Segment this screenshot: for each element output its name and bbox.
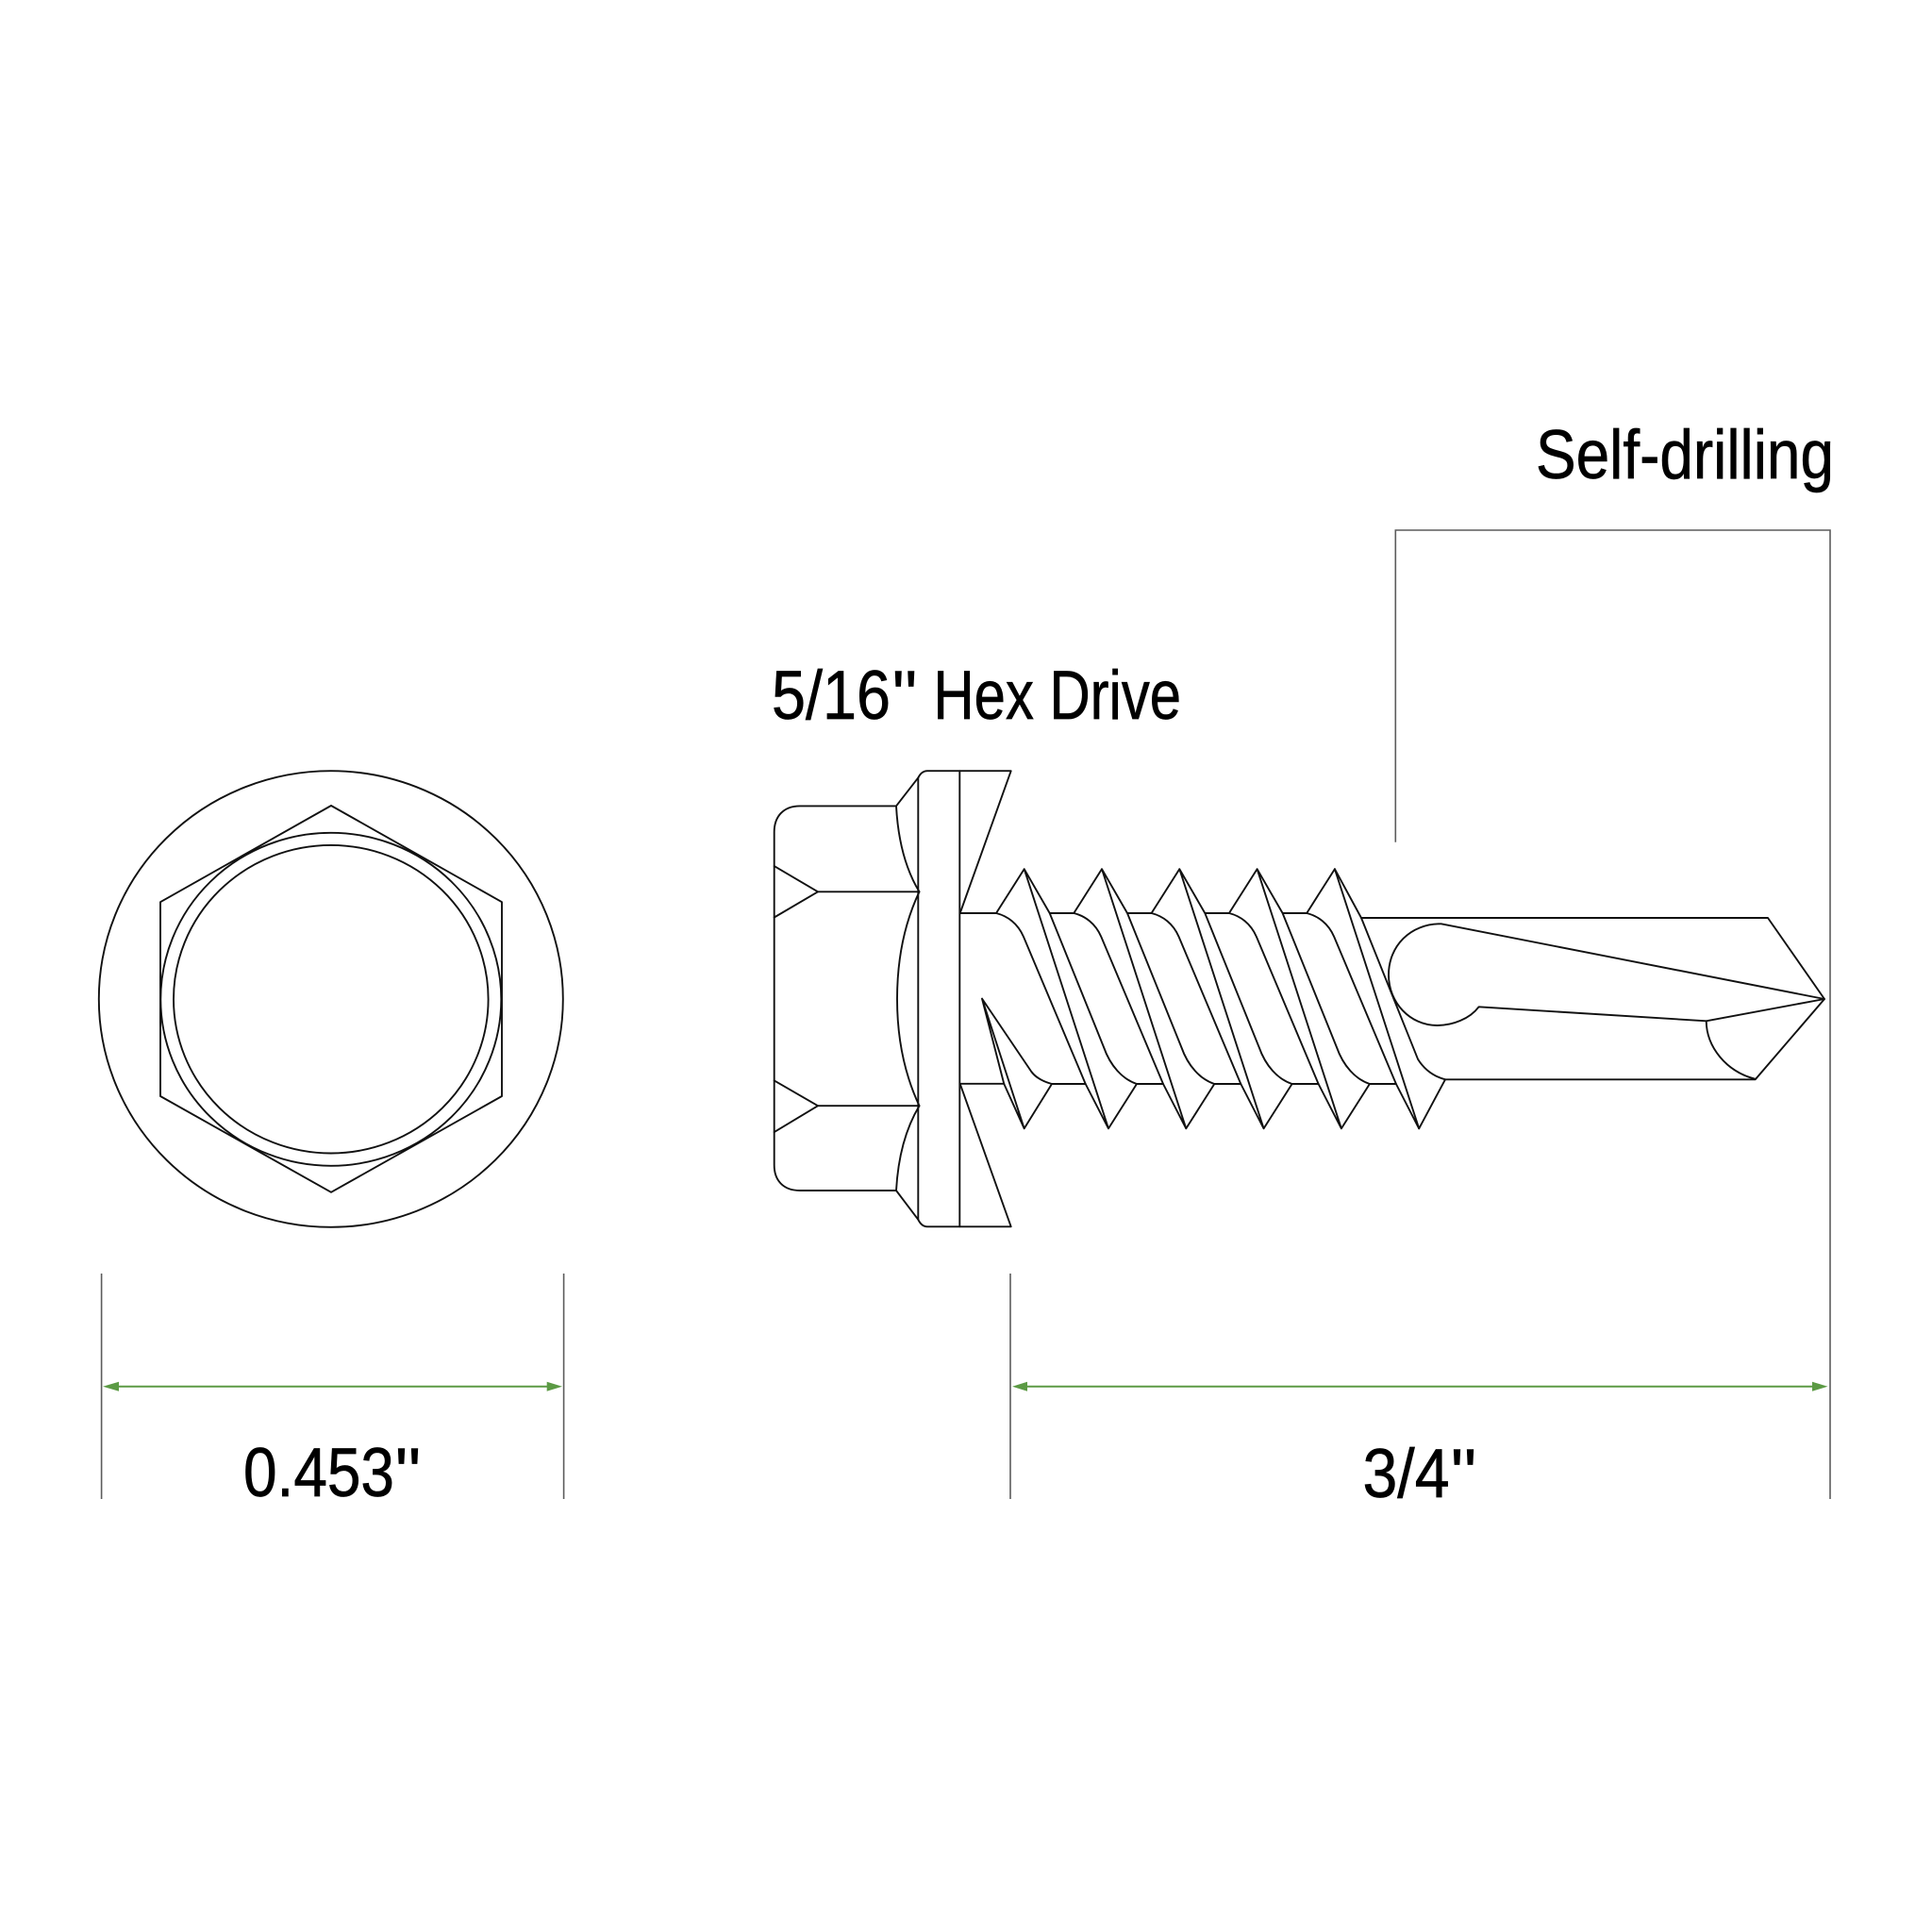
label: hex drive size: 5/16 — [772, 658, 891, 734]
dimension: head diameter — [102, 1274, 564, 1499]
drill point — [1361, 918, 1824, 1079]
label: screw length value: 3/4 — [1362, 1436, 1449, 1512]
label: hex drive size: Hex Drive — [934, 658, 1181, 734]
label: screw length value: '' — [1451, 1436, 1477, 1512]
label: hex drive size — [772, 658, 1181, 734]
label: hex drive size: '' — [892, 658, 917, 734]
icon: screw top view — [99, 771, 563, 1227]
label: head diameter value: 0.453 — [243, 1435, 394, 1511]
label: head diameter value: '' — [394, 1435, 421, 1511]
screw head — [774, 771, 1011, 1226]
dimension: screw length — [1010, 1274, 1828, 1499]
label: self-drilling: Self-drilling — [1536, 417, 1834, 493]
threads — [960, 869, 1445, 1128]
bracket: self-drilling extent — [1395, 530, 1830, 1499]
icon: screw side view — [774, 771, 1824, 1226]
